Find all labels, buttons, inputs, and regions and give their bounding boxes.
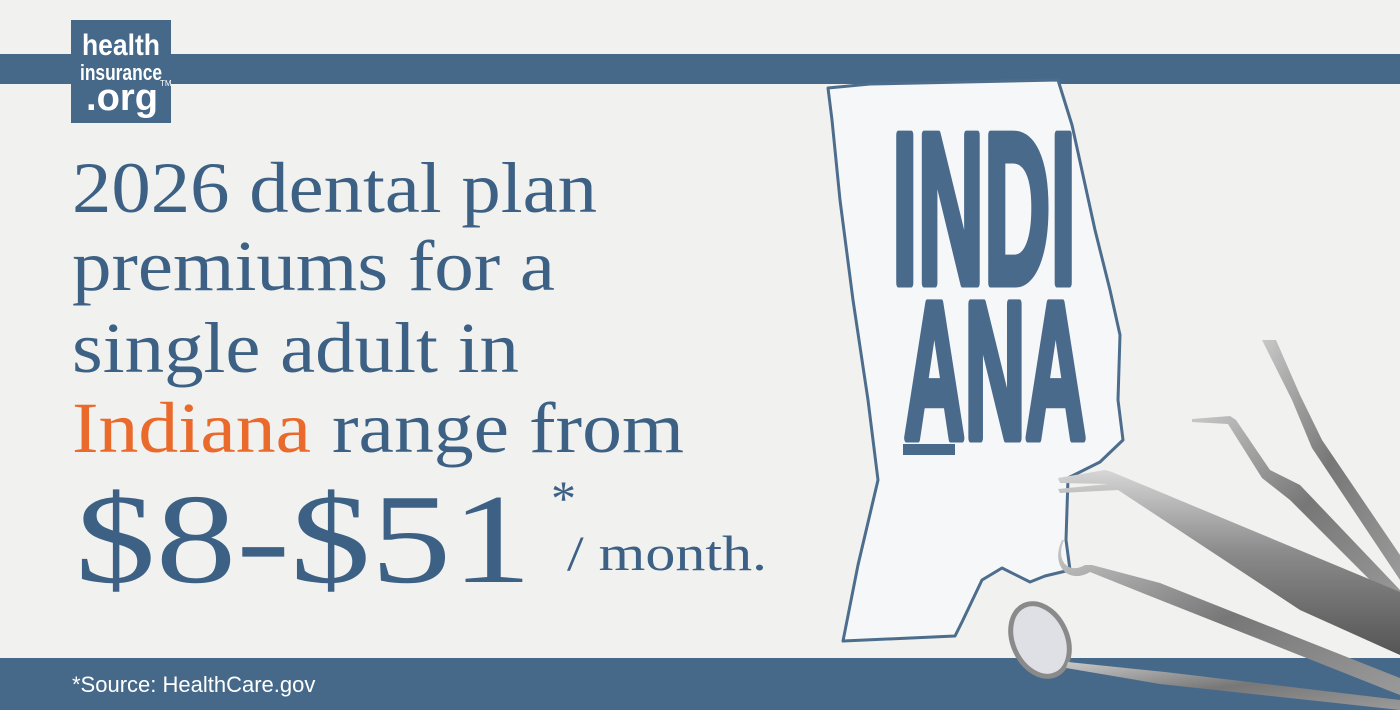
indiana map: INDI	[892, 88, 1076, 329]
logo: TM	[160, 79, 172, 88]
headline: single adult in	[72, 308, 519, 388]
headline: premiums for a	[72, 226, 555, 306]
headline	[72, 148, 684, 468]
top band	[0, 54, 1400, 84]
explorer	[1192, 416, 1400, 610]
bottom band	[0, 658, 1400, 710]
logo	[71, 20, 172, 123]
price: $8-$51	[75, 468, 532, 610]
logo: insurance	[80, 60, 162, 85]
dental tools	[999, 340, 1400, 710]
spatula	[1262, 340, 1400, 580]
price: *	[551, 470, 576, 526]
source: *Source: HealthCare.gov	[72, 672, 315, 697]
hook probe	[1058, 540, 1400, 695]
headline: 2026 dental plan	[72, 148, 597, 228]
indiana map: ANA	[904, 262, 1086, 480]
price	[75, 468, 767, 610]
price: / month.	[567, 525, 767, 581]
mirror	[999, 594, 1081, 686]
headline: Indiana	[72, 388, 311, 468]
logo: health	[82, 29, 160, 62]
logo: .org	[86, 77, 158, 119]
tweezers	[1058, 470, 1400, 655]
indiana map	[828, 80, 1123, 641]
headline: range from	[332, 388, 684, 468]
